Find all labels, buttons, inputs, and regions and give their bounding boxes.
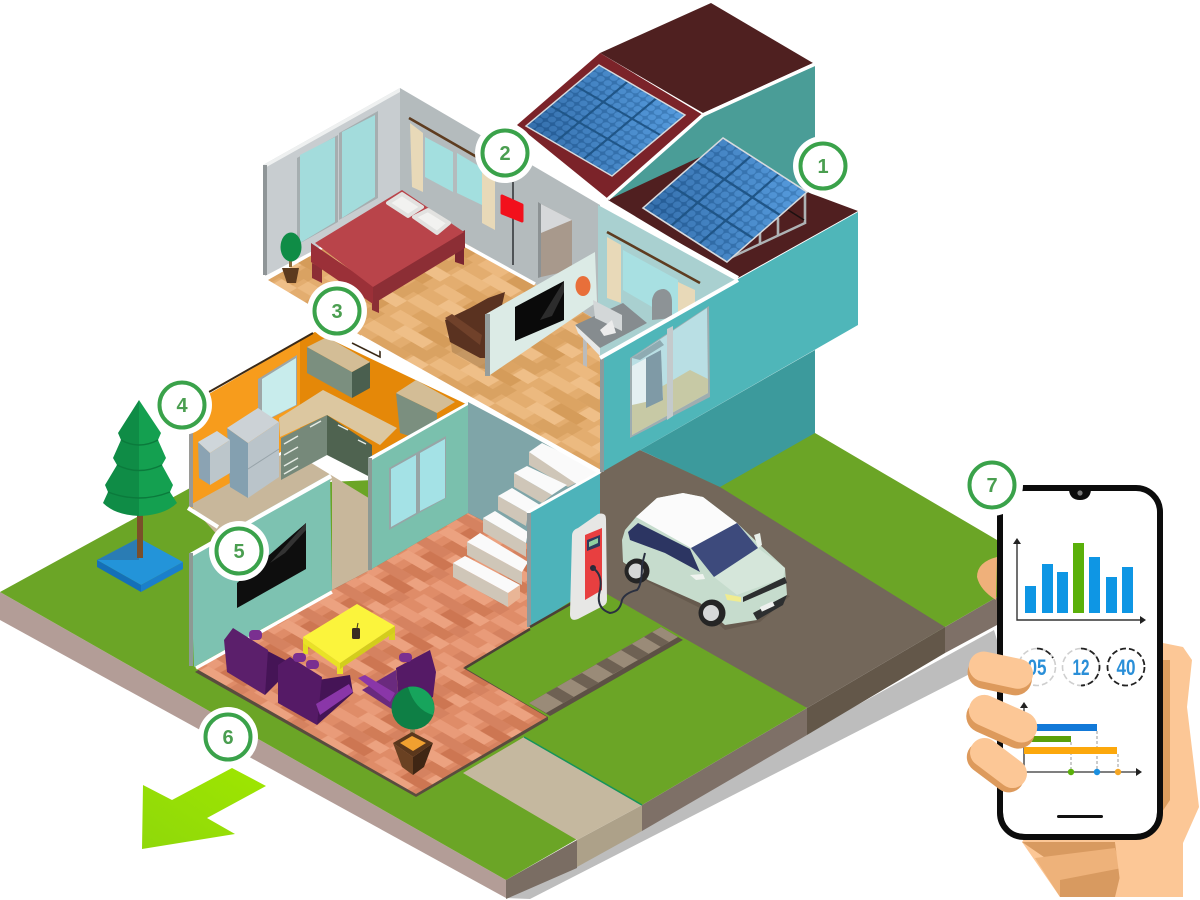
living room floor [195,513,548,797]
sliding glass door [630,306,710,438]
living room back wall [468,402,600,600]
office curtains and rod [607,232,700,343]
armchair [445,292,505,370]
fingers [961,649,1042,799]
bar chart [1013,538,1146,624]
bed [311,190,465,313]
dial 12: 12 [1072,655,1090,680]
car [622,493,790,630]
badge 5: 5 [233,541,245,563]
badge 2 [475,123,535,183]
badge 7: 7 [986,475,998,497]
home battery [198,431,230,485]
top flat roof [600,3,813,113]
car body [622,493,787,625]
partition wall with TV [485,252,597,376]
front lawn [524,640,807,805]
kitchen floor [190,450,372,592]
bedroom right wall [400,88,600,322]
bedroom plant [280,232,302,283]
tree [97,400,183,592]
car rear wheel [624,558,650,584]
door [538,202,572,278]
slab white edge [360,337,600,472]
dial 40: 40 [1116,655,1136,680]
badge 6: 6 [222,727,234,749]
front upper teal wall [600,212,858,472]
lower teal block [602,350,815,487]
wall with TV [189,474,332,668]
charging station [570,514,645,620]
phone body [1000,488,1160,838]
desk and computer [575,289,672,367]
solar panel lower [643,138,807,262]
badge 4 [152,375,212,435]
dial 05: 05 [1028,655,1046,680]
bedroom left wall [263,88,400,276]
potted plant [392,686,434,775]
badge 5 [209,521,269,581]
dial 05 [1018,648,1056,686]
wall cabinet [307,337,370,398]
car hood [714,548,785,595]
timeline chart [1020,702,1142,776]
upper sloped roof [517,53,703,198]
badge 6 [198,707,258,767]
coffee table [303,604,395,674]
arrow [142,768,266,849]
kitchen counter [279,390,397,480]
refrigerator [227,408,279,498]
ground slab [0,433,997,899]
car side windows [628,523,700,572]
car grille and lights [690,533,787,620]
badge 4: 4 [176,395,188,417]
tall cabinet [396,380,455,445]
stepping stones [529,627,683,716]
armchair left [224,628,288,695]
walkway [463,737,642,840]
car windshield [691,523,758,577]
badge 1 [793,136,853,196]
upper floor [263,88,735,472]
lower roof [608,138,858,278]
car front wheel [698,600,726,626]
upper wood floor [268,205,600,470]
solar panel upper [526,65,685,176]
curtains and rod [409,118,495,230]
living room [189,402,602,797]
hand palm [1022,643,1199,897]
inverter with wire [502,182,522,265]
stair wall [527,472,600,627]
dial 12 [1062,648,1100,686]
badge 1: 1 [817,156,829,178]
front lawn near garage [465,590,661,703]
kitchen orange walls [190,332,468,510]
badge 3 [307,281,367,341]
exterior [517,3,858,487]
solar panel support [730,194,805,258]
badge 3: 3 [331,301,343,323]
kitchen room [188,332,468,592]
badge 7 [961,454,1023,516]
kitchen edge [188,508,218,527]
hand thumb [977,557,997,600]
stairs [453,443,602,607]
driveway [600,450,945,708]
office wall [598,205,735,358]
badge 2: 2 [499,143,511,165]
dial 40 [1108,648,1144,686]
armchair right [358,650,436,713]
car roof [636,493,737,548]
kitchen window [258,355,297,425]
roof upper teal gable [608,66,815,200]
armchair centre [278,653,353,725]
phone and hand [961,488,1199,897]
wall with window [368,402,468,570]
charging cable [593,553,645,613]
